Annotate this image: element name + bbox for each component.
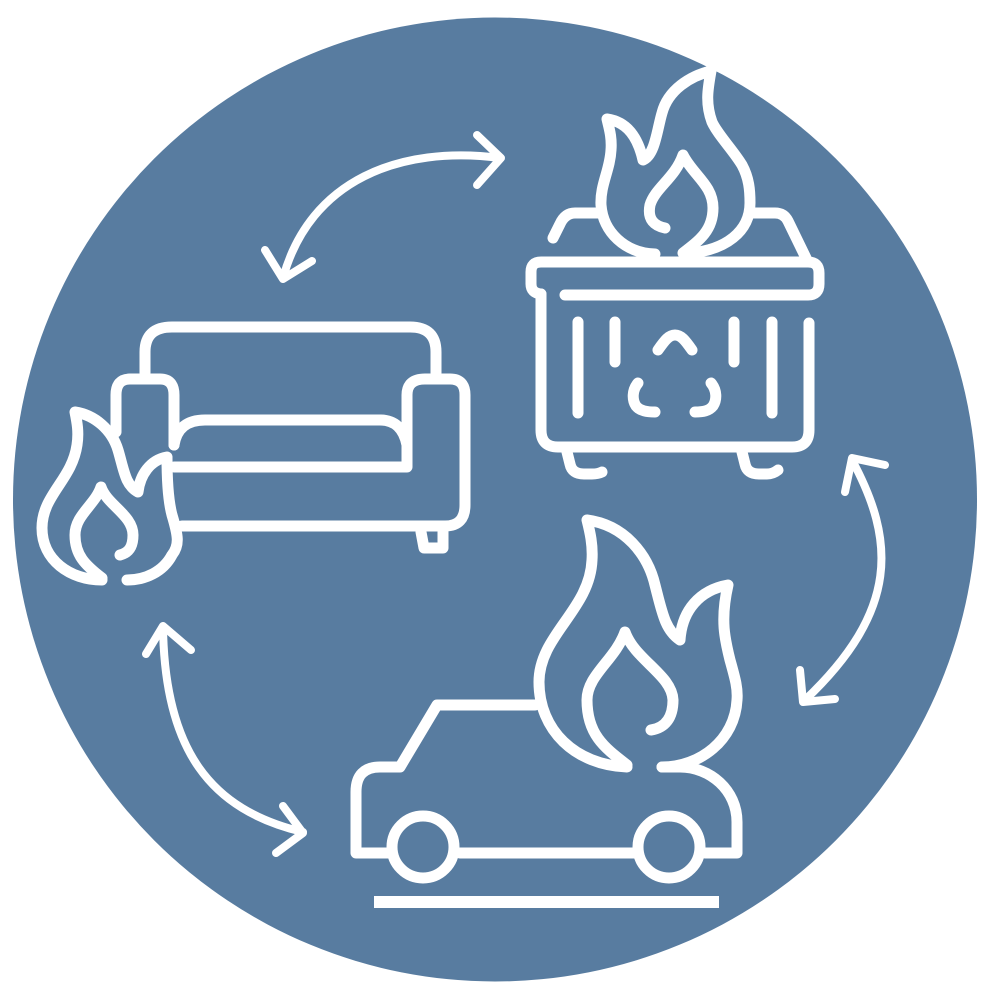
sofa seat xyxy=(174,420,407,445)
dumpster inner flame xyxy=(649,155,713,253)
dumpster lid xyxy=(531,262,819,295)
car wheels xyxy=(392,816,454,878)
dumpster lid top xyxy=(553,213,806,258)
car body xyxy=(356,705,737,853)
sofa foot xyxy=(421,532,443,548)
icon: burning car xyxy=(356,520,737,902)
ground line xyxy=(374,896,719,908)
arrow: car to sofa xyxy=(146,626,303,853)
dumpster body xyxy=(541,294,809,447)
dumpster feet xyxy=(567,452,778,474)
icon: burning dumpster xyxy=(531,71,819,474)
arrow: sofa to dumpster xyxy=(265,135,501,279)
icon: burning sofa xyxy=(42,327,465,580)
car inner flame xyxy=(587,632,673,765)
dumpster flame xyxy=(601,71,750,254)
sofa right arm and base xyxy=(174,379,465,526)
arrow: dumpster to car xyxy=(800,458,885,702)
sofa left arm xyxy=(116,379,174,445)
car flame xyxy=(539,520,737,767)
sofa flame xyxy=(42,412,177,580)
dumpster ribs xyxy=(578,322,772,413)
recycling symbol xyxy=(633,335,716,412)
sofa inner flame xyxy=(75,487,133,578)
sofa back xyxy=(145,327,436,373)
